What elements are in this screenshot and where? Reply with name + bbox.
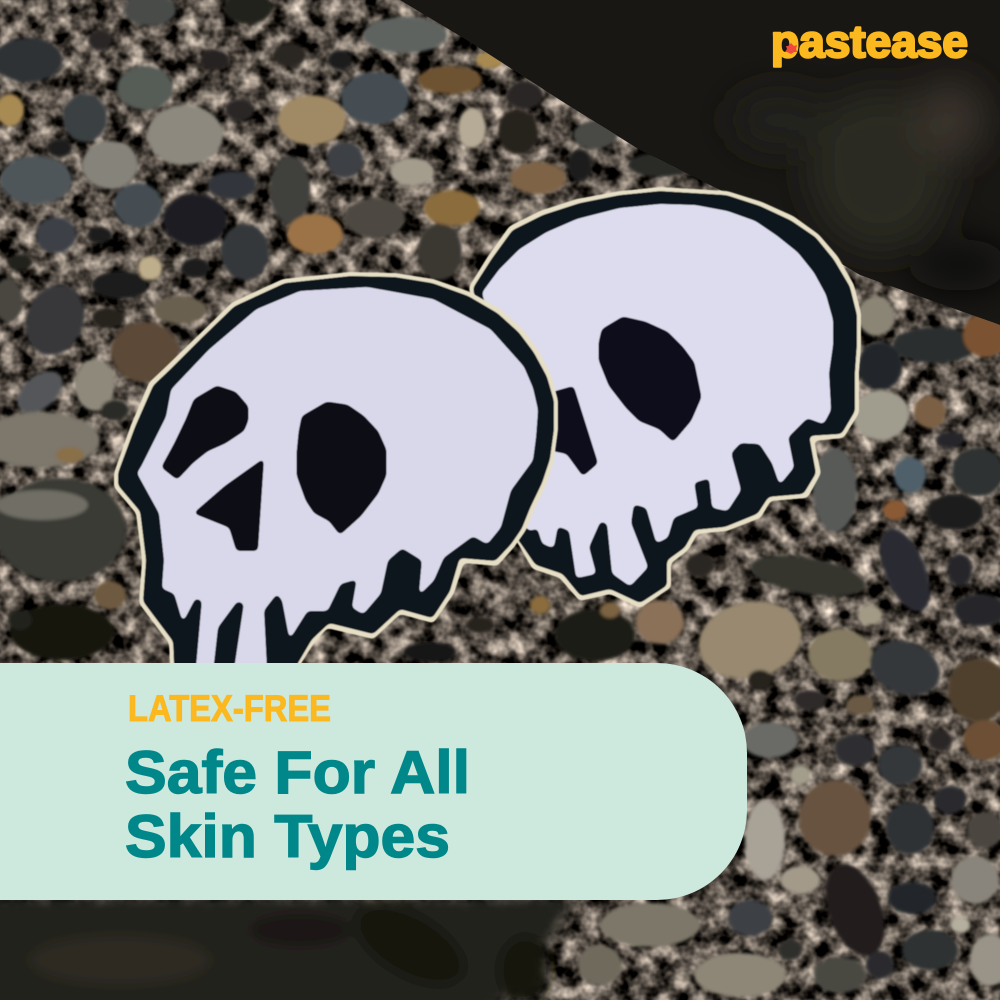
heading: safe for all skin types: Safe For All <box>125 739 470 806</box>
icon: maple leaf <box>785 43 797 54</box>
skull face <box>483 205 832 585</box>
skull small eye socket <box>163 387 247 478</box>
photo background: dark blurred foreground <box>0 889 575 1000</box>
eyebrow: latex-free: LATEX-FREE <box>128 688 331 729</box>
heading: safe for all skin types <box>125 739 470 870</box>
skull nose <box>195 460 263 550</box>
text panel <box>0 663 747 900</box>
skull large eye socket <box>298 403 385 533</box>
skull right eye socket <box>600 318 700 440</box>
skull face <box>138 288 537 690</box>
product: right skull pastie <box>470 188 860 607</box>
heading: safe for all skin types: Skin Types <box>125 803 450 870</box>
skull nose <box>552 387 597 475</box>
product: left skull pastie <box>115 273 557 690</box>
brand logo: pastease: pastease <box>771 16 968 67</box>
